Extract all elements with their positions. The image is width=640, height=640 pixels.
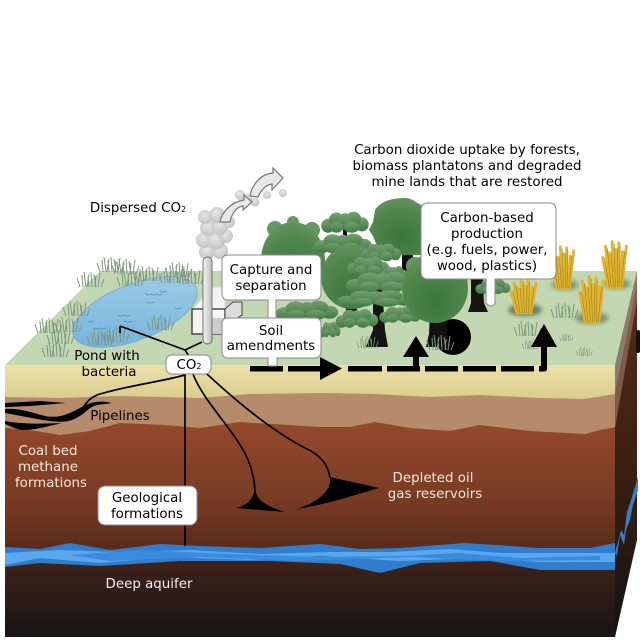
- tree: far round tree: [369, 198, 434, 274]
- label: depleted oil gas reservoirs: [388, 471, 482, 502]
- clay layer: [5, 393, 615, 440]
- deep aquifer water band: [5, 543, 615, 573]
- label: coal bed methane formations: formations: [15, 476, 87, 491]
- heading: forest uptake: mine lands that are restored: [371, 175, 563, 190]
- label: deep aquifer: Deep aquifer: [106, 577, 193, 592]
- tree: right small tree behind callout: [468, 279, 510, 312]
- arrow: up to crops: [531, 324, 557, 372]
- arrow: lower smoke arrow: [220, 195, 252, 222]
- label: pond with bacteria: [74, 349, 140, 380]
- trees: [261, 198, 510, 355]
- callout: soil amendments: [222, 318, 321, 366]
- icon: black circle: [435, 319, 471, 355]
- callout: carbon-based production: [421, 203, 556, 306]
- factory building: [192, 287, 242, 334]
- smoke plume: [196, 189, 287, 260]
- red rock layer: [5, 422, 615, 556]
- callout: capture and separation: [222, 255, 321, 319]
- tufts under trees: [357, 335, 454, 350]
- CO2 pipeline network: [5, 326, 379, 546]
- deep rock layer: [5, 555, 615, 637]
- label: pond with bacteria: bacteria: [82, 365, 136, 380]
- callout: soil amendments: amendments: [227, 339, 315, 354]
- pond with bacteria: [63, 262, 207, 362]
- callout: carbon-based production: production: [451, 227, 523, 242]
- arrow: dashed carbon flow line: [250, 324, 557, 380]
- tree: front pine: [336, 243, 421, 347]
- tree: foreground round tree: [400, 253, 468, 347]
- arrow: up to trees: [403, 336, 429, 366]
- heading: forest uptake: biomass plantatons and degraded: [352, 159, 582, 174]
- label: coal bed methane formations: Coal bed: [19, 444, 77, 459]
- smokestack: [203, 257, 212, 344]
- label: dispersed CO2: Dispersed CO2: [90, 201, 186, 216]
- callout: soil amendments: Soil: [259, 324, 283, 339]
- depleted reservoir left: [236, 488, 285, 512]
- callout: geological formations: [98, 486, 197, 525]
- callout: capture and separation: separation: [235, 279, 307, 294]
- energy crop reeds: [508, 242, 631, 356]
- depleted reservoir right: [296, 477, 379, 509]
- callout: geological formations: formations: [111, 507, 183, 522]
- callout: capture and separation: Capture and: [230, 263, 312, 278]
- label: coal bed methane formations: methane: [18, 460, 78, 475]
- arrow: upper smoke arrow: [250, 168, 283, 197]
- callout: geological formations: Geological: [112, 491, 182, 506]
- sand layer: [5, 365, 615, 399]
- right side face of block: [615, 271, 640, 637]
- label: CO2 node: [166, 355, 211, 374]
- callout: carbon-based production: Carbon-based: [440, 211, 534, 226]
- label: CO2 node: CO2: [177, 358, 201, 373]
- label: depleted oil gas reservoirs: Depleted oil: [393, 471, 473, 486]
- coal bed formations: [5, 401, 112, 430]
- heading: forest uptake: [352, 143, 582, 190]
- block diagram: ground cross-section: [5, 271, 640, 637]
- tree: lower left pine foliage: [276, 301, 340, 337]
- label: coal bed methane formations: [15, 444, 87, 491]
- tree: left round tree: [261, 216, 325, 298]
- grass tufts around pond: [35, 257, 204, 357]
- label: pond with bacteria: Pond with: [74, 349, 140, 364]
- heading: forest uptake: Carbon dioxide uptake by forests,: [354, 143, 580, 158]
- tree: middle round tree: [321, 245, 383, 318]
- callout: carbon-based production: (e.g. fuels, power,: [426, 243, 548, 258]
- callout: carbon-based production: wood, plastics): [437, 259, 537, 274]
- label: pipelines: Pipelines: [90, 409, 150, 424]
- label: depleted oil gas reservoirs: gas reservoirs: [388, 487, 482, 502]
- grass surface: [5, 271, 637, 365]
- tree: rear pine: [314, 212, 372, 255]
